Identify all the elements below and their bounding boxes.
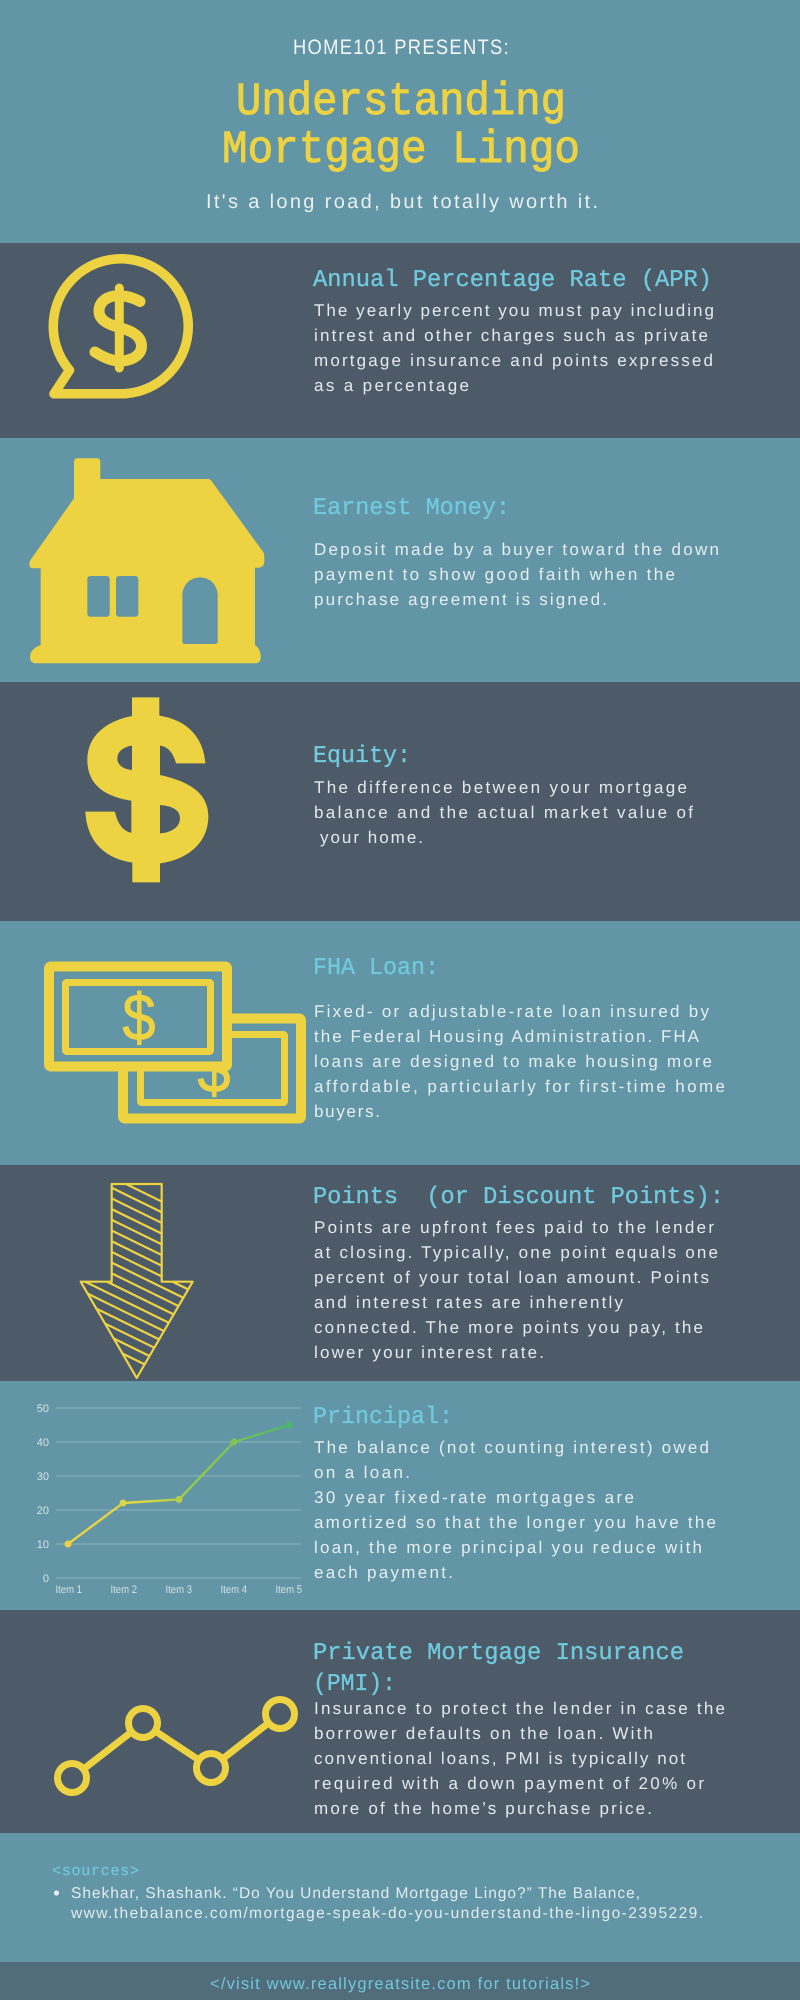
body text <box>314 1218 718 1362</box>
body text: more of the home’s purchase price. <box>314 1799 652 1818</box>
line chart: Item 4 <box>220 1584 247 1596</box>
icon: two banknotes: $ <box>198 1032 230 1106</box>
body text: intrest and other charges such as private <box>314 326 708 345</box>
icon: speech bubble with dollar sign <box>53 259 188 394</box>
icon: large dollar sign <box>85 697 208 882</box>
panel: principal <box>0 1381 800 1610</box>
body text: Deposit made by a buyer toward the down <box>314 540 719 559</box>
body text: conventional loans, PMI is typically not <box>314 1749 685 1768</box>
heading: Points (or Discount Points): <box>313 1184 724 1211</box>
body text: your home. <box>320 828 423 847</box>
line chart: Item 2 <box>110 1584 137 1596</box>
presenter line: HOME101 PRESENTS: <box>293 36 510 59</box>
body text: at closing. Typically, one point equals one <box>314 1243 718 1262</box>
line chart: 20 <box>37 1505 49 1517</box>
heading: (PMI): <box>313 1671 396 1698</box>
panel: earnest money <box>0 438 800 682</box>
body text <box>314 1438 716 1582</box>
body text: buyers. <box>314 1102 380 1121</box>
body text <box>314 540 719 609</box>
line chart: 40 <box>37 1437 49 1449</box>
footer: </visit www.reallygreatsite.com for tutorials!> <box>210 1975 590 1993</box>
body text: connected. The more points you pay, the <box>314 1318 703 1337</box>
body text: 30 year fixed-rate mortgages are <box>314 1488 634 1507</box>
body text: payment to show good faith when the <box>314 565 675 584</box>
line chart: 50 <box>37 1403 49 1415</box>
body text: borrower defaults on the loan. With <box>314 1724 653 1743</box>
body text: loans are designed to make housing more <box>314 1052 712 1071</box>
body text: The yearly percent you must pay including <box>314 301 714 320</box>
line chart <box>37 1403 302 1596</box>
body text: required with a down payment of 20% or <box>314 1774 704 1793</box>
icon: two banknotes: $ <box>122 980 156 1054</box>
body text: balance and the actual market value of <box>314 803 693 822</box>
title: Mortgage Lingo <box>222 124 580 176</box>
body text: affordable, particularly for first-time home <box>314 1077 725 1096</box>
panel: header <box>0 0 800 243</box>
body text: The difference between your mortgage <box>314 778 687 797</box>
body text: as a percentage <box>314 376 469 395</box>
source citation: www.thebalance.com/mortgage-speak-do-you-understand-the-lingo-2395229. <box>70 1905 703 1922</box>
body text: The balance (not counting interest) owed <box>314 1438 709 1457</box>
line chart: Item 5 <box>276 1584 302 1596</box>
body text <box>314 1699 725 1818</box>
panel: private mortgage insurance <box>0 1610 800 1833</box>
line chart: 10 <box>37 1539 49 1551</box>
body text <box>314 1002 725 1121</box>
body text: the Federal Housing Administration. FHA <box>314 1027 700 1046</box>
body text: Points are upfront fees paid to the lender <box>314 1218 714 1237</box>
body text: purchase agreement is signed. <box>314 590 607 609</box>
panel: points <box>0 1157 800 1396</box>
body text: on a loan. <box>314 1463 410 1482</box>
source citation: Shekhar, Shashank. “Do You Understand Mortgage Lingo?” The Balance, <box>71 1885 640 1902</box>
heading <box>313 1640 684 1698</box>
heading: FHA Loan: <box>313 955 439 982</box>
line chart: Item 1 <box>56 1584 82 1596</box>
subtitle: It's a long road, but totally worth it. <box>206 191 598 213</box>
heading: Private Mortgage Insurance <box>313 1640 684 1667</box>
source citation <box>54 1885 703 1922</box>
body text: mortgage insurance and points expressed <box>314 351 713 370</box>
body text: Insurance to protect the lender in case the <box>314 1699 725 1718</box>
panel: sources <box>0 1833 800 1962</box>
line chart: Item 3 <box>166 1584 192 1596</box>
heading: Principal: <box>313 1404 453 1431</box>
panel: FHA loan <box>0 921 800 1165</box>
icon: connected nodes line <box>58 1700 294 1792</box>
heading: Earnest Money: <box>313 495 510 522</box>
body text: and interest rates are inherently <box>314 1293 624 1312</box>
sources heading: <sources> <box>52 1863 139 1880</box>
title <box>222 76 580 176</box>
body text: each payment. <box>314 1563 453 1582</box>
body text: loan, the more principal you reduce with <box>314 1538 702 1557</box>
panel: equity <box>0 682 800 921</box>
body text <box>314 301 714 395</box>
icon: hatched down arrow <box>80 1182 194 1380</box>
panel: annual percentage rate <box>0 243 800 438</box>
line chart: 30 <box>37 1471 49 1483</box>
icon: two banknotes <box>49 966 301 1118</box>
heading: Equity: <box>313 743 411 770</box>
body text: lower your interest rate. <box>314 1343 544 1362</box>
body text: Fixed- or adjustable-rate loan insured by <box>314 1002 710 1021</box>
body text: percent of your total loan amount. Points <box>314 1268 709 1287</box>
line chart: 0 <box>43 1573 49 1585</box>
footer <box>0 1962 800 2000</box>
heading: Annual Percentage Rate (APR) <box>313 267 712 294</box>
icon: house <box>29 458 264 663</box>
body text: amortized so that the longer you have the <box>314 1513 716 1532</box>
title: Understanding <box>236 76 566 128</box>
body text <box>314 778 693 847</box>
